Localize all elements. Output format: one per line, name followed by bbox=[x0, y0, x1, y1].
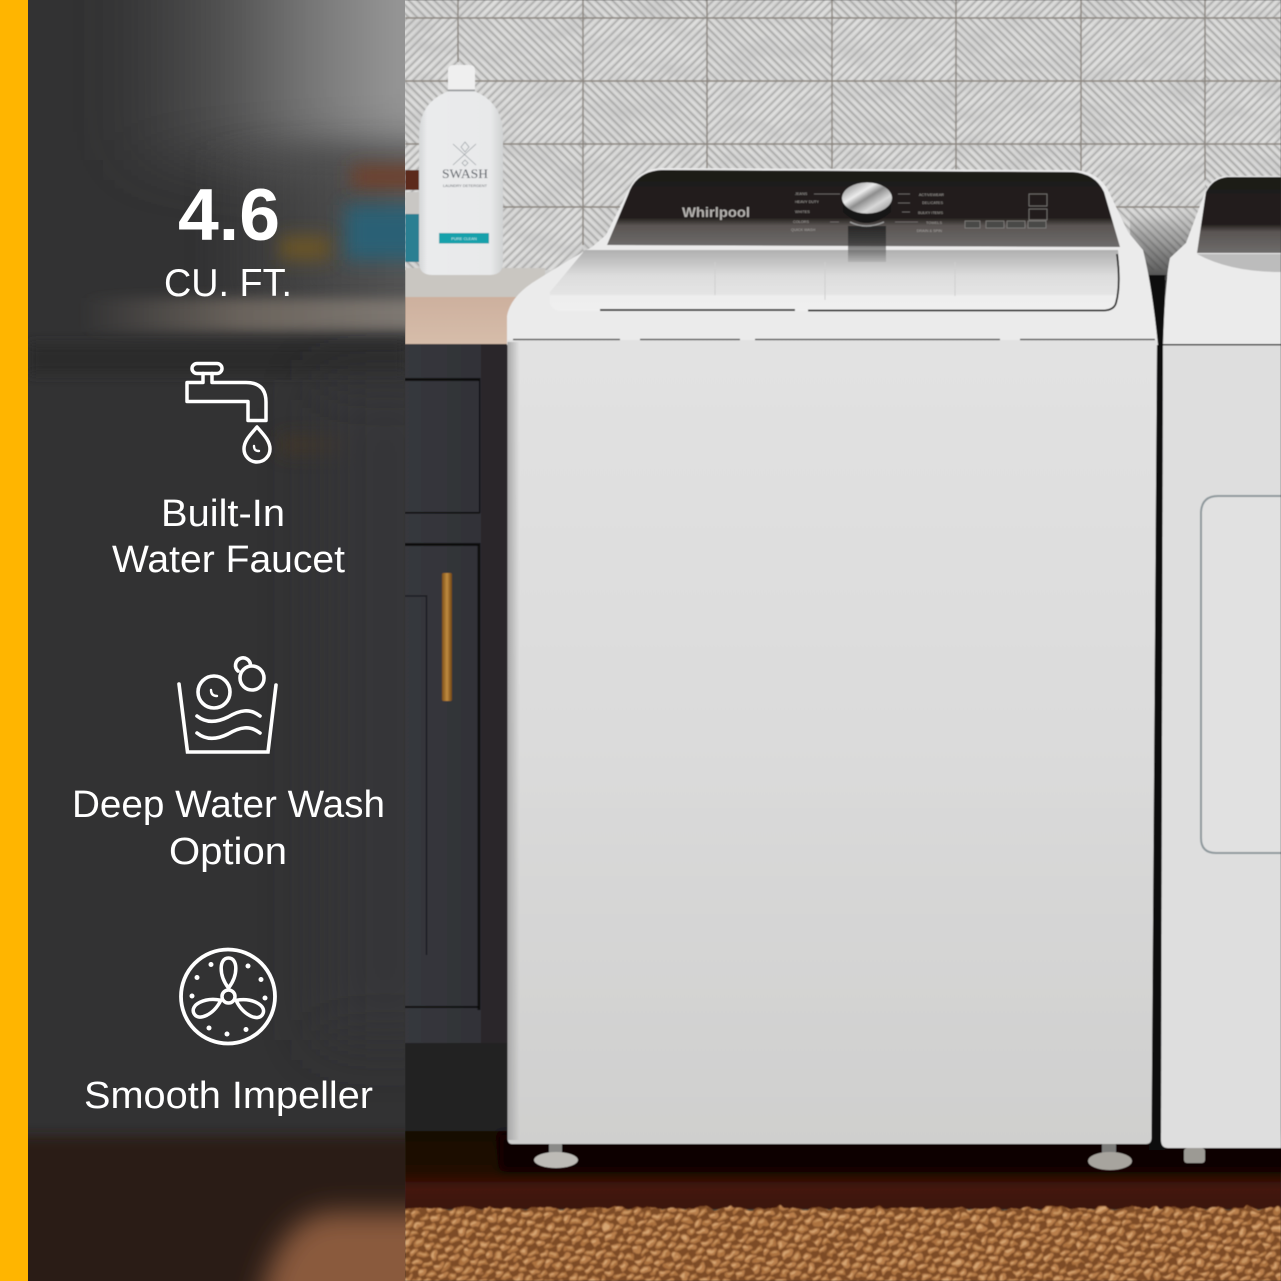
feature: built-in water faucet bbox=[112, 364, 345, 581]
floor bbox=[405, 1131, 1281, 1209]
cycle labels left: COLORS bbox=[793, 220, 810, 224]
bottle brand: SWASH bbox=[442, 166, 488, 181]
cycle labels right: TOWELS bbox=[926, 221, 942, 225]
shadow under appliances bbox=[500, 1135, 1281, 1171]
cycle labels right bbox=[917, 193, 944, 233]
cycle labels left bbox=[791, 192, 819, 232]
washer bbox=[507, 168, 1165, 1170]
label: built-in water faucet: Water Faucet bbox=[112, 539, 345, 581]
icon: wash tub with bubbles bbox=[179, 658, 276, 752]
gap between appliances bbox=[1149, 275, 1165, 1150]
label: built-in water faucet: Built-In bbox=[161, 493, 285, 535]
cycle labels left: QUICK WASH bbox=[791, 228, 816, 232]
cycle labels right: BULKY ITEMS bbox=[918, 211, 943, 215]
label: built-in water faucet bbox=[112, 493, 345, 581]
control panel bbox=[607, 170, 1120, 247]
shelf items behind bottle bbox=[405, 170, 419, 262]
laundry detergent bottle: LAUNDRY DETERGENT bbox=[443, 184, 488, 188]
tile wall bbox=[333, 0, 1281, 277]
cycle labels left: HEAVY DUTY bbox=[795, 200, 819, 204]
laundry detergent bottle bbox=[419, 65, 503, 275]
bottle teal label bbox=[439, 233, 489, 244]
counter top bbox=[405, 268, 545, 344]
bottle teal label: PURE CLEAN bbox=[451, 236, 477, 241]
panel: dark frosted feature panel bbox=[28, 0, 405, 1281]
icon: faucet with drop bbox=[187, 364, 270, 462]
washer lid bbox=[549, 250, 1119, 311]
icon: impeller bbox=[181, 950, 275, 1044]
panel blurred background bbox=[28, 0, 405, 1281]
capacity stat bbox=[164, 175, 292, 305]
label: smooth impeller: Smooth Impeller bbox=[84, 1075, 373, 1117]
cycle labels left: JEANS bbox=[795, 192, 808, 196]
dryer foot bbox=[1184, 1148, 1205, 1163]
yellow accent bar bbox=[0, 0, 28, 1281]
label: deep water wash option: Deep Water Wash bbox=[72, 784, 385, 826]
scene: laundry room photo bbox=[333, 0, 1281, 1281]
selector knob bbox=[842, 182, 892, 262]
cycle labels right: DRAIN & SPIN bbox=[917, 229, 942, 233]
feature: deep water wash bbox=[72, 658, 385, 873]
cycle labels left: WHITES bbox=[795, 210, 810, 214]
dryer bbox=[1161, 176, 1281, 1163]
cycle labels right: DELICATES bbox=[922, 201, 943, 205]
dryer door bbox=[1201, 496, 1281, 853]
cycle labels right: ACTIVEWEAR bbox=[919, 193, 944, 197]
washer lid housing bbox=[507, 168, 1158, 345]
cabinet bbox=[405, 344, 510, 1133]
feature: smooth impeller bbox=[84, 950, 373, 1117]
label: deep water wash option bbox=[72, 784, 385, 873]
option buttons bbox=[965, 194, 1047, 228]
washer cabinet body bbox=[508, 340, 1157, 1144]
capacity number: 4.6 bbox=[178, 175, 280, 256]
capacity unit: CU. FT. bbox=[164, 262, 292, 305]
brand wordmark: Whirlpool bbox=[682, 205, 750, 220]
jute rug bbox=[380, 1208, 1281, 1281]
cabinet handle bbox=[442, 573, 452, 701]
label: deep water wash option: Option bbox=[169, 831, 287, 873]
washer feet bbox=[534, 1144, 1132, 1170]
